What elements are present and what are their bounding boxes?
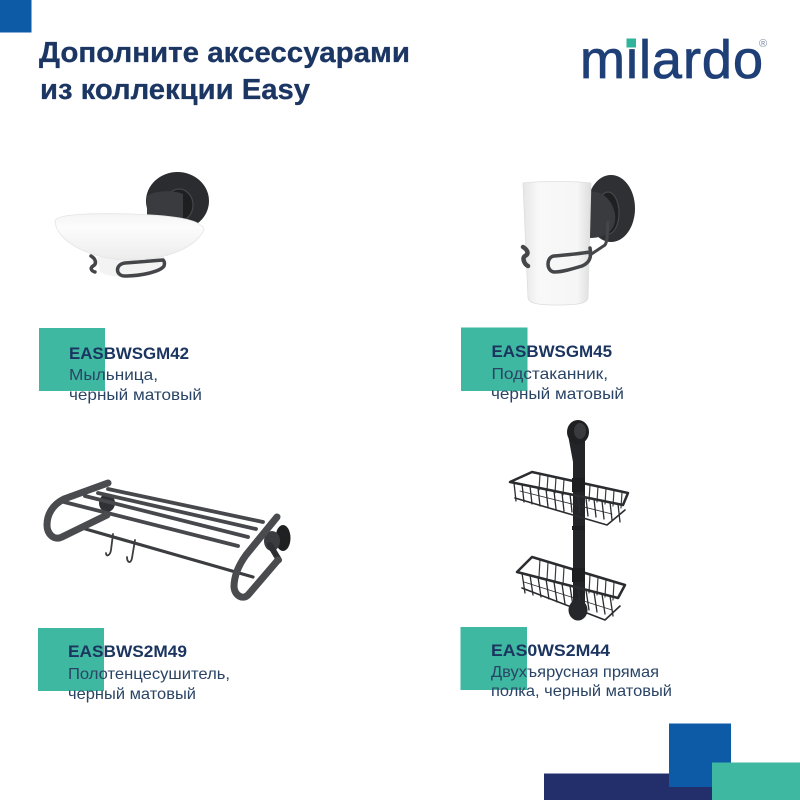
- product: soap dish: [55, 172, 209, 277]
- label: EASBWS2M49: черный матовый: [68, 686, 196, 703]
- label: EAS0WS2M44: EAS0WS2M44: [491, 641, 611, 660]
- label: EAS0WS2M44: [491, 641, 672, 700]
- icon: dish foot: [97, 257, 165, 277]
- icon: white dish: [55, 214, 204, 260]
- teal block 1: [39, 328, 105, 391]
- title: из коллекции Easy: [40, 74, 310, 106]
- label: EAS0WS2M44: полка, черный матовый: [491, 683, 672, 700]
- label: EASBWS2M49: [68, 642, 230, 703]
- label: EASBWSGM42: черный матовый: [69, 387, 202, 404]
- label: EASBWS2M49: EASBWS2M49: [68, 642, 187, 661]
- icon: top rails: [64, 489, 263, 546]
- label: EASBWSGM45: [491, 342, 624, 403]
- icon: vertical strap: [568, 435, 585, 612]
- teal block 3: [38, 628, 104, 691]
- product: two-tier shelf: [510, 420, 628, 620]
- icon: wire holder: [523, 222, 608, 272]
- icon: lower bar and hooks: [82, 528, 253, 577]
- icon: right end frame: [234, 517, 278, 597]
- icon: wall mounts: [99, 494, 290, 560]
- label: EAS0WS2M44: Двухъярусная прямая: [491, 664, 659, 681]
- icon: suction mount: [146, 172, 209, 230]
- icon: left end frame: [47, 483, 108, 538]
- label: EASBWS2M49: Полотенцесушитель,: [68, 666, 230, 683]
- title: [39, 37, 410, 106]
- icon: bottom suction mount: [568, 600, 588, 620]
- icon: upper basket back wall: [539, 474, 622, 508]
- icon: lower basket: [517, 557, 625, 620]
- icon: clips: [572, 478, 585, 582]
- logo: milardo: ®: [759, 38, 767, 50]
- icon: upper basket: [510, 472, 628, 525]
- icon: top suction mount: [567, 420, 589, 444]
- product: tumbler holder: [523, 175, 635, 305]
- label: EASBWSGM45: черный матовый: [491, 386, 624, 403]
- label: EASBWSGM42: Мыльница,: [69, 367, 158, 384]
- label: EASBWSGM45: EASBWSGM45: [492, 342, 612, 361]
- corner square top-left: [0, 0, 32, 32]
- corner blocks bottom-right: [544, 724, 800, 800]
- icon: frosted glass: [523, 182, 591, 305]
- icon: lower basket back wall: [539, 559, 614, 600]
- label: EASBWSGM42: [69, 344, 202, 404]
- teal block 4: [460, 627, 527, 690]
- icon: wire holder: [91, 256, 164, 276]
- label: EASBWSGM45: Подстаканник,: [492, 366, 608, 383]
- teal block 2: [461, 328, 528, 391]
- product: towel rack: [47, 483, 290, 597]
- label: EASBWSGM42: EASBWSGM42: [69, 344, 189, 363]
- title: Дополните аксессуарами: [39, 37, 410, 69]
- logo: milardo: milardo: [580, 30, 763, 90]
- icon: suction mount: [587, 175, 635, 242]
